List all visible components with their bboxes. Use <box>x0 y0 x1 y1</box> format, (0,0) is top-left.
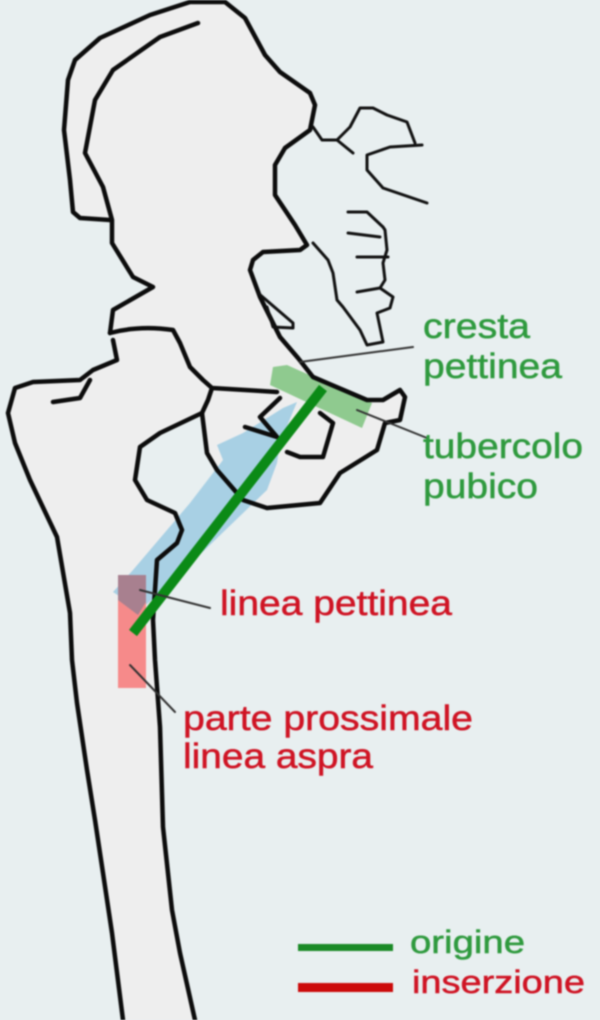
label: linea pettinea: linea pettinea <box>220 584 453 623</box>
label: parte prossimale linea aspra <box>183 699 473 776</box>
sacrum outline <box>313 108 427 345</box>
label: tubercolo pubico: tubercolo <box>423 427 583 466</box>
pelvis outline <box>64 2 405 508</box>
insertion area: linea aspra <box>118 575 146 688</box>
leader lines <box>130 347 427 712</box>
label: parte prossimale linea aspra: linea aspra <box>183 737 374 776</box>
label: tubercolo pubico <box>423 427 583 506</box>
label: cresta pettinea: pettinea <box>423 347 563 386</box>
legend: origine: origine <box>410 924 525 960</box>
femur outline <box>8 340 202 1020</box>
bone fills <box>8 2 405 1020</box>
origin line <box>133 388 323 633</box>
legend: inserzione: inserzione <box>412 964 585 1000</box>
legend: inserzione <box>298 964 585 1000</box>
label: parte prossimale linea aspra: parte prossimale <box>183 699 473 738</box>
label: cresta pettinea <box>423 307 563 386</box>
legend <box>298 924 585 1000</box>
muscle: pectineus <box>113 402 297 610</box>
insertion overlap area: linea pettinea <box>118 575 146 615</box>
label: tubercolo pubico: pubico <box>423 467 538 506</box>
label: cresta pettinea: cresta <box>423 307 531 346</box>
origin area: cresta pettinea <box>270 365 372 428</box>
legend: origine <box>298 924 525 960</box>
